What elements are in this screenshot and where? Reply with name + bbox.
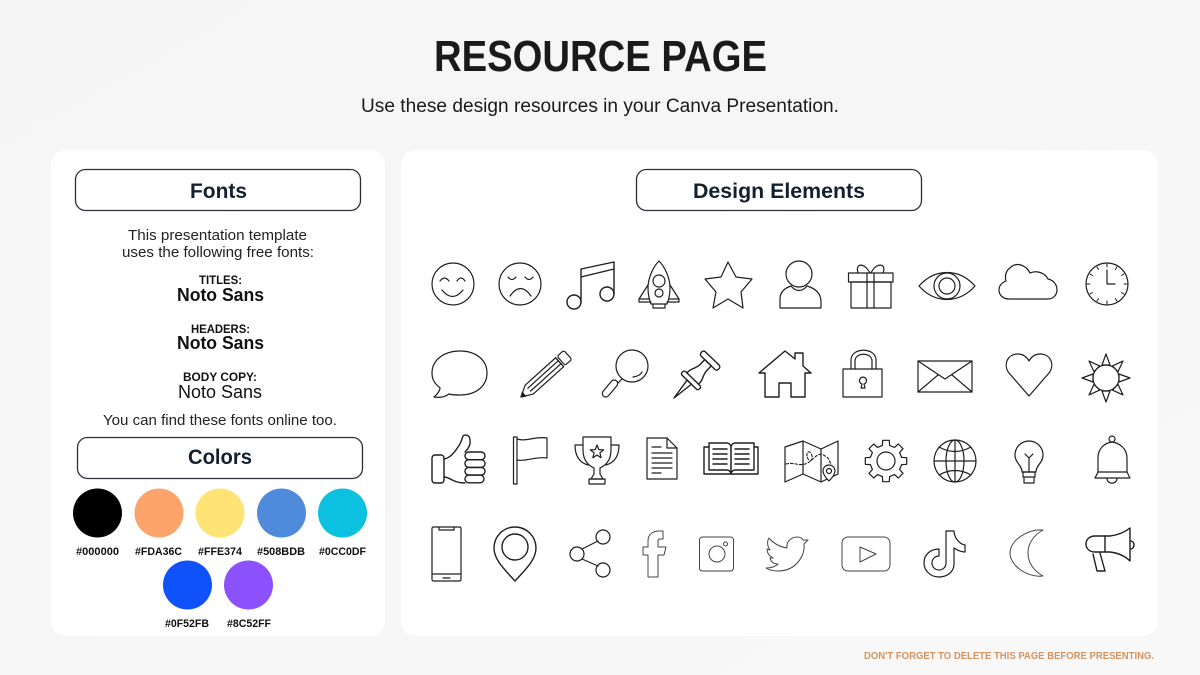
text: fonts online note: You can find these fonts online too. (103, 413, 337, 429)
swatch: yellow (196, 488, 244, 558)
icon: heart (1006, 354, 1052, 396)
title: RESOURCE PAGE (434, 32, 767, 81)
swatch: cyan (318, 488, 367, 558)
icon: clock (1086, 263, 1128, 305)
icon: share (570, 530, 610, 577)
footer note: DON'T FORGET TO DELETE THIS PAGE BEFORE PRESENTING. (864, 651, 1154, 662)
text: titles font: Noto Sans (177, 285, 264, 305)
icon: map (785, 441, 838, 482)
icon: sad face (499, 263, 541, 305)
icon: cloud (999, 265, 1057, 299)
icon: twitter (766, 537, 808, 571)
icon: thumbs up (432, 435, 485, 483)
swatch: purple: #8C52FF (227, 618, 271, 630)
icon: smile (432, 263, 474, 305)
icon: tiktok (924, 531, 965, 577)
swatch: mid blue (257, 488, 306, 558)
icon: smartphone (432, 527, 461, 581)
heading: fonts (76, 170, 360, 210)
swatch: yellow: #FFE374 (198, 546, 243, 558)
icon: person (780, 261, 821, 308)
icon: megaphone (1086, 528, 1134, 571)
heading: design elements (636, 170, 922, 210)
swatch: orange (134, 488, 184, 558)
swatch: orange: #FDA36C (135, 546, 182, 558)
icon: push pin (665, 350, 721, 406)
icon: facebook (643, 531, 666, 577)
icon: house (759, 351, 811, 397)
text: headers font: Noto Sans (177, 333, 264, 353)
icon: trophy (575, 437, 619, 484)
swatch: cyan: #0CC0DF (319, 546, 366, 558)
text: font intro: This presentation template (128, 228, 307, 244)
text: titles font (177, 273, 264, 305)
text: body copy font (178, 370, 262, 402)
swatch: mid blue: #508BDB (257, 546, 305, 558)
icon: padlock (843, 350, 882, 397)
panel: design elements (401, 150, 1158, 636)
text: font intro (122, 228, 314, 261)
icon: document (647, 438, 677, 479)
text: body copy font: BODY COPY: (183, 370, 257, 384)
icon: instagram (700, 537, 734, 571)
icon: gift (848, 265, 893, 308)
swatch: royal blue: #0F52FB (165, 618, 209, 630)
icon: speech bubble (432, 351, 487, 397)
swatch: black (73, 488, 122, 558)
icon: gear (865, 440, 907, 482)
icon: eye (919, 272, 975, 300)
icon: sun (1082, 354, 1130, 402)
icon: globe (934, 440, 976, 482)
icon: magnifier (601, 350, 648, 398)
subtitle: Use these design resources in your Canva Presentation. (361, 96, 839, 117)
text: headers font (177, 322, 264, 353)
swatch: royal blue (163, 560, 212, 630)
swatch: black: #000000 (76, 546, 119, 558)
text: font intro: uses the following free fonts: (122, 245, 314, 261)
heading: design elements: Design Elements (693, 180, 865, 203)
swatch: purple (224, 560, 273, 630)
icon: location pin (494, 527, 536, 581)
heading: colors: Colors (188, 446, 252, 469)
text: titles font: TITLES: (199, 273, 242, 287)
icon: crescent moon (1010, 530, 1043, 576)
icon: youtube (842, 537, 890, 571)
icon: music notes (567, 262, 614, 309)
icon: bell (1095, 436, 1130, 483)
icon: flag (514, 437, 547, 484)
icon: star (705, 262, 752, 308)
text: body copy font: Noto Sans (178, 382, 262, 402)
heading: colors (78, 438, 362, 478)
icon: rocket (639, 261, 679, 308)
icon: light bulb (1015, 441, 1043, 483)
heading: fonts: Fonts (190, 180, 247, 203)
panel: fonts and colors (51, 150, 385, 636)
icon: pencil (517, 350, 572, 401)
icon: envelope (918, 361, 972, 392)
text: headers font: HEADERS: (191, 322, 250, 336)
icon: open book (704, 443, 758, 474)
